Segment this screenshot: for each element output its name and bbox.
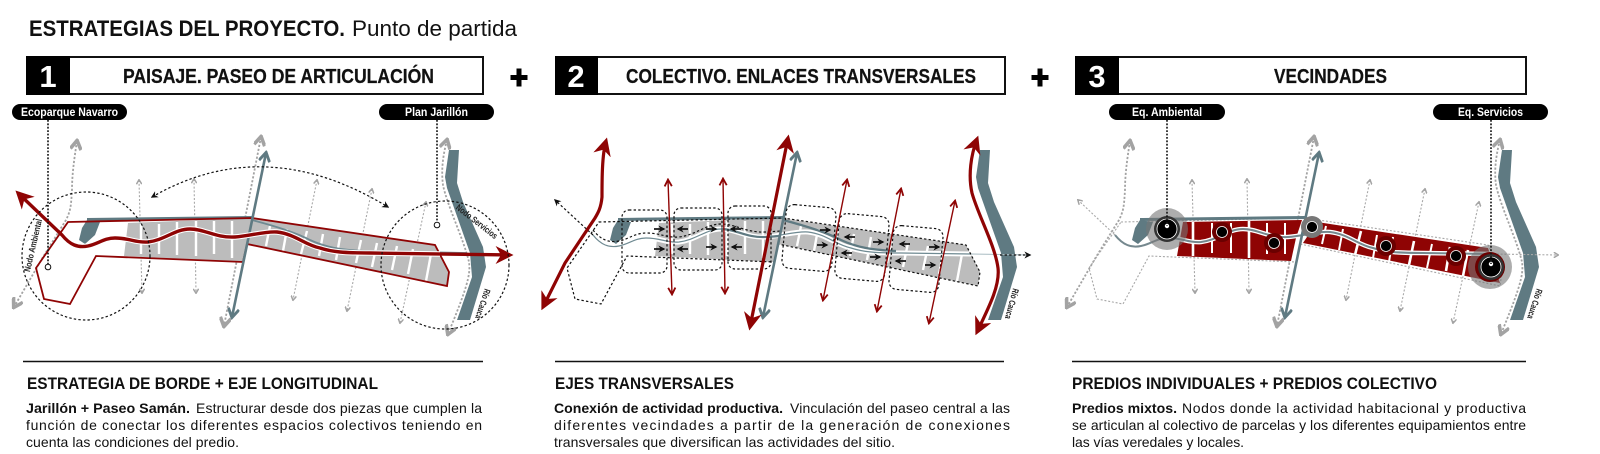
title [29, 16, 518, 41]
header: vecindades [1075, 56, 1526, 95]
text block: paisaje: ESTRATEGIA DE BORDE + EJE LONGITUDINAL [27, 375, 378, 393]
header: vecindades: VECINDADES [1274, 66, 1387, 88]
text block: colectivo: diferentes vecindades a partir de la generación de conexiones [554, 417, 1010, 433]
transverse red arrows [543, 138, 998, 332]
text block: paisaje: función de conectar los diferentes espacios colectivos teniendo en [26, 417, 482, 433]
node: large servicios [1468, 245, 1512, 289]
header: colectivo: COLECTIVO. ENLACES TRANSVERSALES [626, 66, 976, 88]
text block: colectivo [554, 362, 1010, 450]
text block: vecindades [1072, 362, 1526, 450]
header: colectivo: 2 [567, 59, 585, 94]
node: large ambiental [1146, 208, 1188, 250]
text block: vecindades: Nodos donde la actividad habitacional y productiva [1182, 400, 1526, 416]
label: Eq. Servicios: Eq. Servicios [1458, 107, 1523, 119]
plus sign [1032, 68, 1048, 86]
site plan diagram: paisaje: Nodo Ambiental [22, 218, 44, 273]
title: Punto de partida [352, 16, 518, 41]
header: paisaje [26, 56, 483, 95]
label: Ecoparque Navarro: Ecoparque Navarro [21, 107, 118, 119]
site plan diagram: paisaje: Río Cauca [473, 288, 492, 321]
site plan diagram: paisaje [14, 120, 510, 334]
label: Ecoparque Navarro [12, 104, 127, 120]
small nodes [1212, 216, 1466, 266]
text block: colectivo: Vinculación del paseo central a las [790, 400, 1010, 416]
red parcels [1177, 220, 1500, 283]
dotted parcels [622, 204, 944, 293]
plus sign [510, 68, 528, 86]
panel: vecindades [1067, 56, 1558, 450]
label: Plan Jarillón: Plan Jarillón [405, 107, 468, 119]
header: paisaje: 1 [39, 59, 57, 94]
site plan diagram: colectivo: Río Cauca [1003, 288, 1021, 321]
text block: paisaje: cuenta las condiciones del predio. [26, 434, 239, 450]
header: paisaje: PAISAJE. PASEO DE ARTICULACIÓN [123, 64, 434, 88]
label: Plan Jarillón [379, 104, 494, 120]
text block: vecindades: se articulan al colectivo de parcelas y los diferentes equipamientos entre [1072, 417, 1526, 433]
text block: paisaje: Jarillón + Paseo Samán. [26, 400, 190, 416]
text block: colectivo: Conexión de actividad productiva. [554, 400, 783, 416]
text block: paisaje [23, 362, 483, 450]
label: Eq. Ambiental [1109, 104, 1225, 120]
small black arrows [654, 229, 939, 265]
site plan diagram: paisaje: Nodo Servicios [454, 202, 500, 241]
text block: vecindades: las vías veredales y locales. [1072, 434, 1244, 450]
panel: colectivo [543, 56, 1031, 450]
text block: colectivo: EJES TRANSVERSALES [555, 375, 734, 393]
label: Eq. Ambiental: Eq. Ambiental [1132, 107, 1202, 119]
text block: vecindades: PREDIOS INDIVIDUALES + PREDIOS COLECTIVO [1072, 375, 1437, 393]
header: vecindades: 3 [1088, 59, 1106, 94]
label: Eq. Servicios [1433, 104, 1548, 120]
text block: colectivo: transversales que diversifican las actividades del sitio. [554, 434, 895, 450]
site plan diagram: vecindades: Río Cauca [1525, 288, 1544, 321]
text block: vecindades: Predios mixtos. [1072, 400, 1177, 416]
site plan diagram: colectivo [543, 138, 1031, 332]
text block: paisaje: Estructurar desde dos piezas que cumplen la [196, 400, 482, 416]
panel: paisaje [12, 56, 510, 450]
header: colectivo [555, 56, 1005, 95]
site plan diagram: vecindades [1067, 120, 1558, 334]
title: ESTRATEGIAS DEL PROYECTO. [29, 16, 345, 41]
